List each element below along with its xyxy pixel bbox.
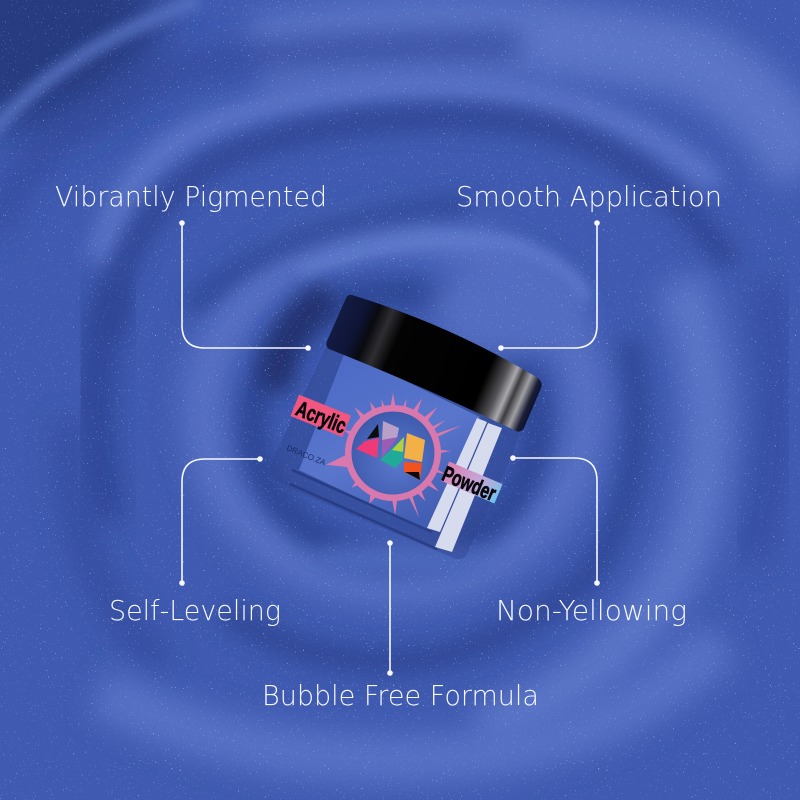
callout: Self-Leveling: Self-Leveling <box>109 594 281 627</box>
callout: Smooth Application <box>456 180 722 351</box>
jar base rim <box>290 470 437 549</box>
callout: Bubble Free Formula: Bubble Free Formula <box>262 679 539 712</box>
callout: Non-Yellowing: Non-Yellowing <box>496 594 687 627</box>
powder fill <box>299 352 480 532</box>
label: Powder <box>439 461 503 507</box>
callout: Self-Leveling <box>109 456 281 627</box>
lid <box>326 295 542 432</box>
label: Acrylic <box>290 395 351 439</box>
callout: Non-Yellowing <box>496 455 687 627</box>
label: Powder: Powder <box>439 461 500 506</box>
callout: Bubble Free Formula <box>262 540 539 712</box>
logo facets <box>356 421 425 480</box>
light strip reflections <box>427 418 502 552</box>
jar site text: DRACO.ZA <box>285 444 328 468</box>
jar body <box>270 345 520 559</box>
label: Acrylic: Acrylic <box>293 396 350 438</box>
callout: Vibrantly Pigmented: Vibrantly Pigmented <box>55 180 327 213</box>
product jar <box>270 295 542 559</box>
callout: Vibrantly Pigmented <box>55 180 327 351</box>
pink splash ring with logo <box>325 393 462 519</box>
callout: Smooth Application: Smooth Application <box>456 180 722 213</box>
